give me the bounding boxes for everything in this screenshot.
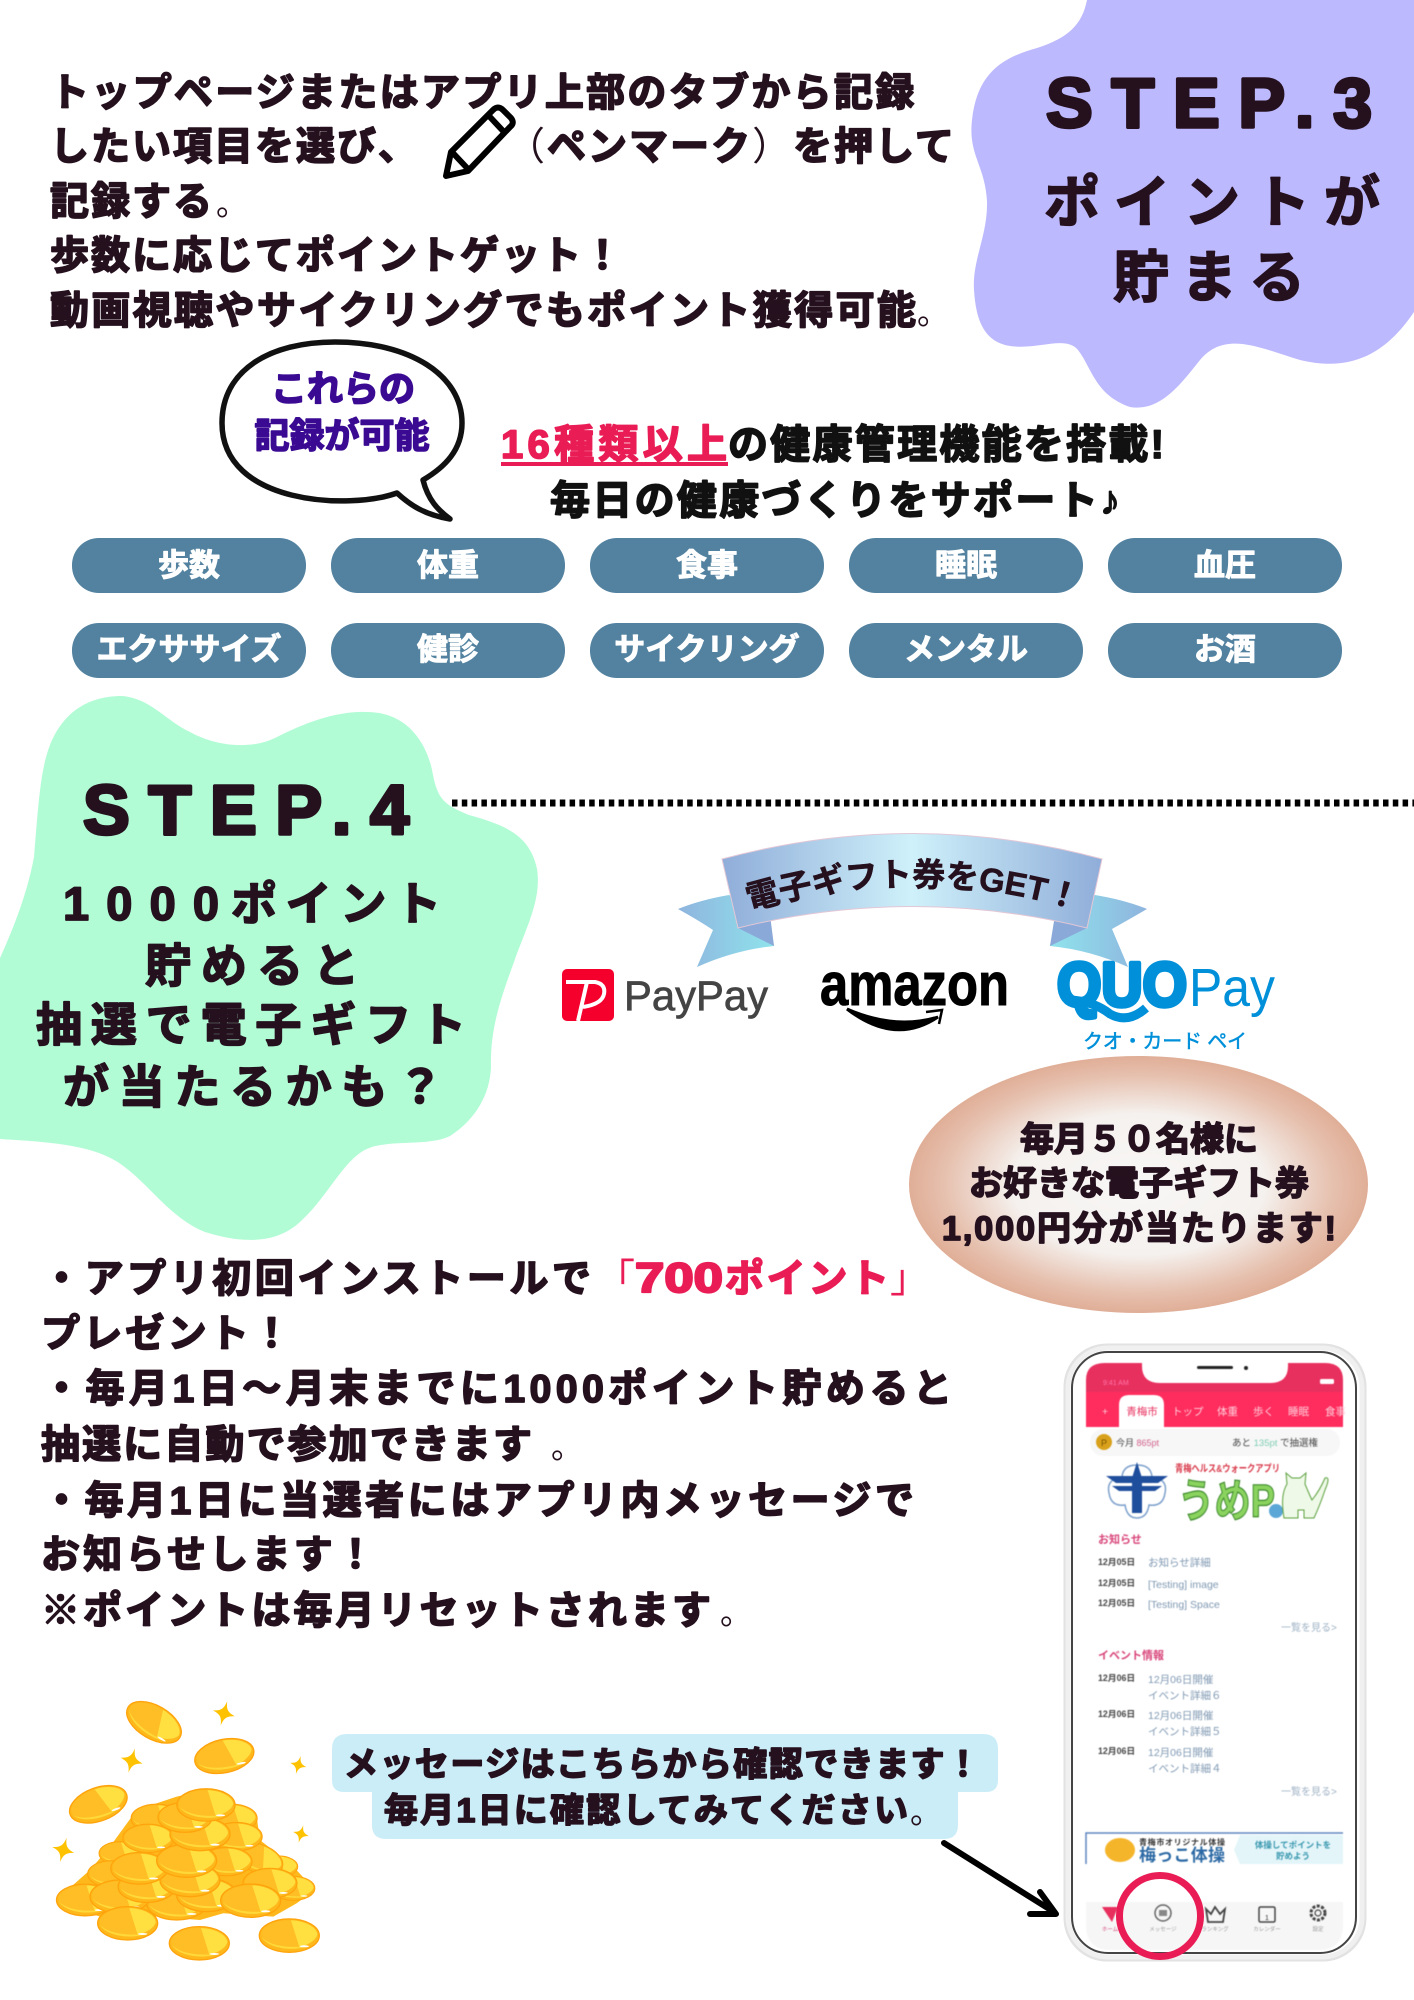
- events list: 12月06日: [1098, 1673, 1135, 1683]
- text block: how the lottery works: 」: [890, 1258, 929, 1301]
- phone screen: あと 135pt で抽選権: [1232, 1437, 1319, 1449]
- logo: QUO Pay: QUO: [1057, 951, 1187, 1020]
- feature pills: お酒: [1194, 632, 1256, 667]
- callout: check your messages: 。: [910, 1794, 942, 1830]
- news list: お知らせ詳細: [1148, 1556, 1211, 1569]
- text block: how to record: 動画視聴やサイクリングでもポイント獲得可能: [50, 290, 916, 333]
- callout: check your messages: メッセージはこちらから確認できます！: [344, 1746, 980, 1784]
- feature pills: 食事: [676, 548, 738, 583]
- callout: monthly 50 winners: [909, 1056, 1368, 1313]
- panel: STEP 4 green blob: [0, 696, 538, 1240]
- phone screen: [1086, 1362, 1346, 1950]
- logo: amazon: amazon: [820, 951, 1009, 1018]
- STEP 3 heading: 貯まる: [1113, 246, 1305, 309]
- tab bar: 設定: [1312, 1925, 1324, 1933]
- text block: how the lottery works: ポイント: [725, 1258, 889, 1301]
- icon: pencil: [446, 108, 513, 176]
- logo: PayPay: PayPay: [624, 972, 768, 1019]
- events list: イベント詳細６: [1148, 1689, 1222, 1702]
- speech bubble: these can be recorded: [222, 342, 462, 519]
- arrow to message tab: [944, 1843, 1056, 1914]
- exercise banner: [1086, 1833, 1343, 1865]
- Ume-P logo: うめP: [1178, 1475, 1275, 1527]
- logo: PayPay: [562, 969, 768, 1021]
- feature pills: メンタル: [904, 632, 1028, 667]
- events list: 12月06日開催: [1148, 1747, 1213, 1759]
- exercise banner: 体操してポイントを: [1255, 1840, 1331, 1850]
- phone screen: トップ: [1172, 1406, 1204, 1418]
- heading: 16 types of health functions: の健康管理機能を搭載!: [728, 423, 1164, 467]
- STEP 3 heading: [1044, 64, 1380, 309]
- text block: how the lottery works: ・アプリ初回インストールで: [42, 1258, 591, 1301]
- text block: how to record: 。: [216, 186, 248, 222]
- news list: [Testing] Space: [1148, 1599, 1220, 1611]
- text block: how the lottery works: ※ポイントは毎月リセットされます: [41, 1590, 711, 1633]
- illustration: pile of gold coins: [49, 1693, 319, 1960]
- feature pills: 体重: [417, 548, 479, 583]
- exercise banner: 貯めよう: [1276, 1851, 1310, 1861]
- Ume-P logo: [1175, 1462, 1328, 1527]
- phone screen: 食事: [1325, 1405, 1346, 1418]
- Ume-P logo: 青梅ヘルス&ウォークアプリ: [1175, 1462, 1280, 1475]
- text block: how the lottery works: 抽選に自動で参加できます: [41, 1424, 532, 1467]
- phone screen: 睡眠: [1288, 1405, 1310, 1418]
- news list: [Testing] image: [1148, 1579, 1219, 1591]
- text block: how the lottery works: プレゼント！: [41, 1313, 291, 1356]
- events list: 12月06日開催: [1148, 1674, 1213, 1686]
- tab bar: ランキング: [1201, 1925, 1229, 1933]
- callout: check your messages: 毎月1日に確認してみてください: [384, 1792, 908, 1830]
- heading: 16 types of health functions: 毎日の健康づくりをサポート♪: [550, 479, 1120, 523]
- ribbon: get e-gift: [678, 833, 1147, 967]
- panel: STEP 3 purple blob: [971, 0, 1414, 408]
- events list: 12月06日: [1098, 1746, 1135, 1756]
- text block: how to record: [50, 71, 956, 333]
- logo: QUO Pay: クオ・カード ペイ: [1083, 1030, 1247, 1053]
- events list: 12月06日: [1098, 1709, 1135, 1719]
- heading: 16 types of health functions: 16種類以上: [501, 423, 727, 467]
- feature pills: [72, 538, 1342, 678]
- phone screen: 体重: [1217, 1405, 1238, 1418]
- news list: 12月05日: [1098, 1578, 1135, 1588]
- text block: how the lottery works: 。: [720, 1595, 752, 1631]
- phone screen: P: [1101, 1438, 1107, 1448]
- tab bar: メッセージ: [1149, 1926, 1177, 1933]
- text block: how the lottery works: 。: [551, 1429, 583, 1465]
- STEP 4 heading: ポイント: [231, 878, 441, 930]
- highlight ring on message tab: [1120, 1876, 1200, 1956]
- text block: how to record: トップページまたはアプリ上部のタブから記録: [50, 71, 917, 115]
- logo: QUO Pay: [1057, 951, 1275, 1053]
- events list: [1098, 1648, 1337, 1798]
- text block: how the lottery works: [41, 1254, 952, 1633]
- feature pills: 健診: [417, 632, 479, 667]
- feature pills: サイクリング: [614, 632, 800, 667]
- STEP 4 heading: 1000: [63, 877, 219, 930]
- feature pills: 歩数: [158, 548, 220, 583]
- tab bar: [1086, 1902, 1343, 1950]
- events list: 12月06日開催: [1148, 1710, 1213, 1722]
- exercise banner: 青梅市オリジナル体操: [1139, 1837, 1225, 1847]
- phone screen: 歩く: [1253, 1405, 1274, 1418]
- phone mockup: [1065, 1345, 1365, 1960]
- events list: イベント詳細５: [1148, 1725, 1222, 1738]
- text block: how to record: （ペンマーク）を押して: [506, 126, 956, 169]
- STEP 3 heading: ポイントが: [1044, 171, 1380, 234]
- text block: how to record: 記録する: [50, 181, 214, 224]
- news list: お知らせ: [1098, 1532, 1142, 1546]
- callout: monthly 50 winners: 1,000円分が当たります!: [942, 1209, 1336, 1248]
- feature pills: エクササイズ: [96, 632, 282, 667]
- text block: how to record: したい項目を選び、: [50, 126, 419, 169]
- phone screen: 9:41 AM: [1103, 1380, 1129, 1387]
- phone body: [1065, 1345, 1365, 1960]
- feature pills: 睡眠: [935, 548, 997, 583]
- text block: how the lottery works: 「: [596, 1258, 635, 1301]
- STEP 4 heading: 貯めると: [145, 940, 359, 992]
- text block: how to record: 歩数に応じてポイントゲット！: [50, 235, 624, 278]
- events list: イベント詳細４: [1148, 1762, 1222, 1775]
- STEP 4 heading: STEP.4: [83, 771, 409, 849]
- STEP 4 heading: が当たるかも？: [63, 1061, 443, 1113]
- heading: 16 types of health functions: [501, 423, 1164, 523]
- callout: check your messages: [332, 1734, 998, 1839]
- speech bubble: these can be recorded: これらの: [271, 368, 415, 409]
- events list: イベント情報: [1098, 1648, 1164, 1662]
- events list: 一覧を見る>: [1281, 1785, 1337, 1798]
- feature pills: 血圧: [1194, 548, 1256, 583]
- STEP 3 heading: STEP.3: [1046, 64, 1372, 142]
- phone screen: 今月 865pt: [1116, 1437, 1160, 1448]
- speech bubble: these can be recorded: 記録が可能: [254, 417, 430, 456]
- text block: how the lottery works: 700: [635, 1254, 723, 1301]
- news list: 一覧を見る>: [1281, 1621, 1337, 1634]
- tab bar: 1: [1265, 1915, 1269, 1922]
- phone screen: +: [1102, 1406, 1108, 1418]
- callout: monthly 50 winners: 毎月５０名様に: [1020, 1121, 1258, 1159]
- news list: 12月05日: [1098, 1557, 1135, 1567]
- text block: how the lottery works: お知らせします！: [41, 1534, 375, 1577]
- STEP 4 heading: 抽選で電子ギフト: [36, 999, 466, 1051]
- ribbon: get e-gift: 電子ギフト券をGET！: [745, 858, 1070, 909]
- callout: monthly 50 winners: お好きな電子ギフト券: [969, 1165, 1309, 1203]
- tab bar: カレンダー: [1253, 1925, 1281, 1933]
- text block: how the lottery works: ・毎月1日に当選者にはアプリ内メッセージで: [42, 1480, 916, 1523]
- text block: how the lottery works: ・毎月1日～月末までに1000ポイント貯めると: [42, 1368, 952, 1411]
- city emblem: [1106, 1462, 1168, 1518]
- text block: how to record: 。: [917, 295, 949, 331]
- news list: 12月05日: [1098, 1598, 1135, 1608]
- news list: [1098, 1532, 1337, 1634]
- STEP 4 heading: [36, 771, 466, 1113]
- tab bar: ホーム: [1102, 1926, 1119, 1933]
- exercise banner: 梅っこ体操: [1139, 1846, 1225, 1865]
- phone screen: 青梅市: [1126, 1405, 1158, 1418]
- logo: QUO Pay: Pay: [1189, 958, 1275, 1018]
